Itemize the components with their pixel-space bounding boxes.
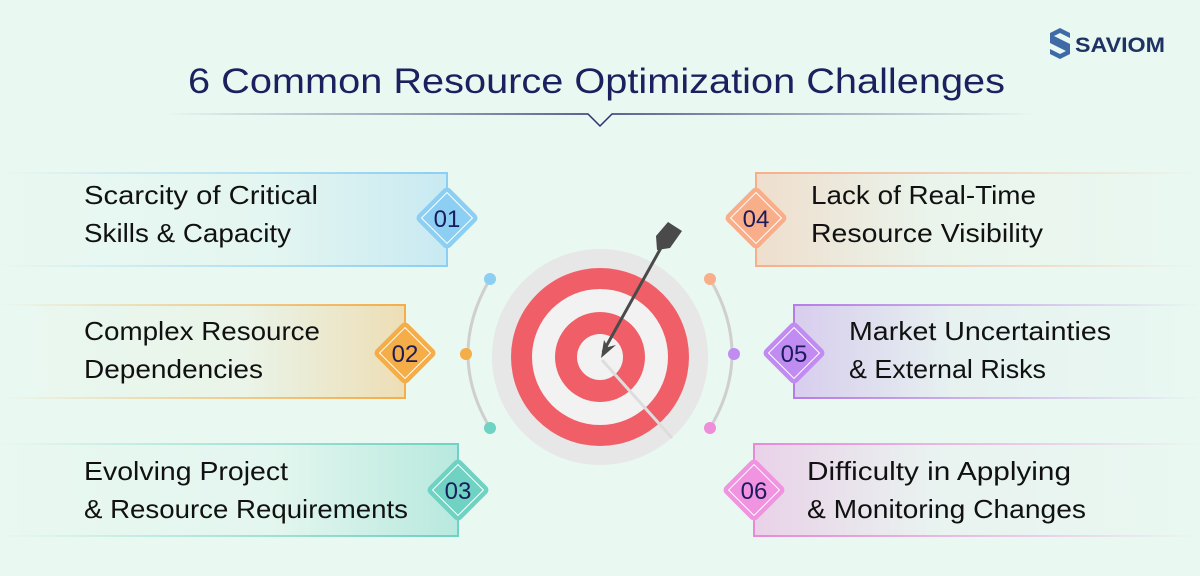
left arc with dots (460, 273, 496, 434)
panel 02: Dependencies (84, 354, 263, 384)
right arc with dots (704, 273, 740, 434)
panel 01: Scarcity of Critical (84, 180, 318, 210)
panel 05 (761, 305, 1200, 398)
panel 03: Evolving Project (84, 456, 289, 486)
panel 06: Difficulty in Applying (807, 456, 1071, 486)
panel 04: Resource Visibility (811, 218, 1043, 248)
panel 03: & Resource Requirements (84, 494, 408, 524)
badge 01 (414, 185, 480, 251)
panel 03 (0, 444, 491, 536)
panel 01: 01 (434, 206, 460, 233)
title: 6 Common Resource Optimization Challenges (188, 62, 1005, 101)
title (165, 62, 1035, 126)
panel 05: Market Uncertainties (849, 316, 1111, 346)
badge 02 (372, 320, 438, 386)
panel 04 (723, 173, 1200, 266)
badge 06 (721, 457, 787, 523)
panel 02: 02 (392, 341, 418, 368)
panel 02: Complex Resource (84, 316, 320, 346)
badge 04 (723, 185, 789, 251)
panel 04: Lack of Real-Time (811, 180, 1036, 210)
panel 01 (0, 173, 480, 266)
panel 04: 04 (743, 206, 769, 233)
panel 02 (0, 305, 438, 398)
badge 05 (761, 320, 827, 386)
badge 03 (425, 457, 491, 523)
logo: Saviom (1050, 28, 1165, 59)
panel 05: 05 (781, 341, 807, 368)
panel 05: & External Risks (849, 354, 1046, 384)
panel 06: & Monitoring Changes (807, 494, 1086, 524)
logo: Saviom: SAVIOM (1075, 34, 1165, 57)
target with arrow (492, 222, 708, 465)
panel 06 (721, 444, 1200, 536)
panel 06: 06 (741, 478, 767, 505)
panel 03: 03 (445, 478, 471, 505)
panel 01: Skills & Capacity (84, 218, 291, 248)
